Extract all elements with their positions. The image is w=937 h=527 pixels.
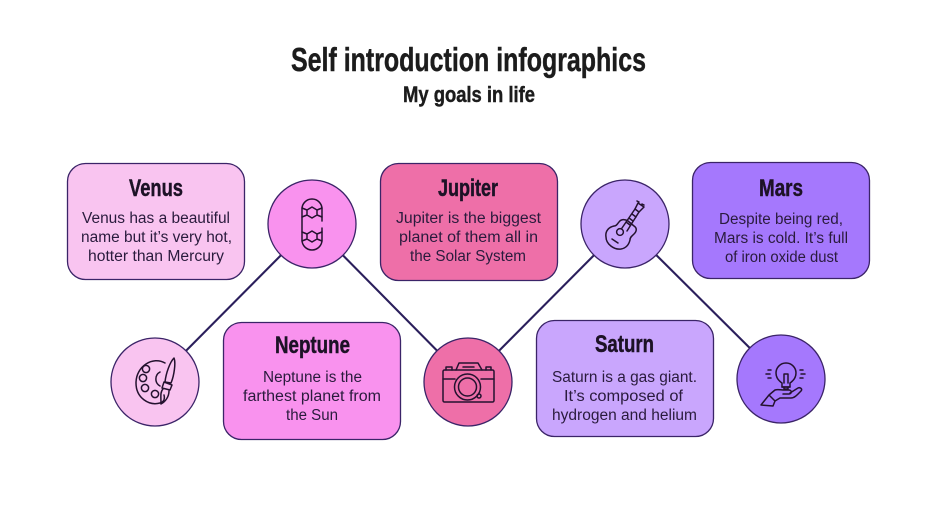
text: Jupiter description: the Solar System xyxy=(410,248,526,265)
text: Saturn description: It’s composed of xyxy=(564,388,684,405)
text: Mars description: Mars is cold. It’s full xyxy=(714,230,848,247)
circle: palette xyxy=(111,338,199,426)
text: Neptune description: farthest planet from xyxy=(243,388,381,405)
title: Self introduction infographics xyxy=(291,41,646,78)
panel: Mars xyxy=(692,162,870,278)
text: Venus description: name but it’s very hot, xyxy=(81,229,232,246)
text: Neptune description: Neptune is the xyxy=(263,369,362,386)
panel: Venus xyxy=(68,164,244,280)
panel: Neptune xyxy=(224,322,400,440)
circle: guitar xyxy=(581,180,669,268)
icon: palette and brush xyxy=(136,358,175,404)
circle: camera xyxy=(424,338,512,426)
text: Saturn description: hydrogen and helium xyxy=(552,407,697,424)
subtitle: My goals in life xyxy=(403,82,535,107)
circle: idea xyxy=(737,335,825,423)
text: Jupiter description: Jupiter is the biggest xyxy=(396,210,542,227)
icon: skateboard xyxy=(302,199,322,250)
heading: Neptune: Neptune xyxy=(275,332,350,359)
heading: Venus: Venus xyxy=(129,175,183,202)
text: Saturn description xyxy=(552,369,697,424)
text: Mars description: Despite being red, xyxy=(719,211,843,228)
text: Jupiter description xyxy=(396,210,542,265)
text: Jupiter description: planet of them all in xyxy=(399,229,538,246)
heading: Mars: Mars xyxy=(759,175,803,202)
heading: Jupiter: Jupiter xyxy=(438,175,498,202)
text: Saturn description: Saturn is a gas giant. xyxy=(552,369,697,386)
icon: light bulb in hand xyxy=(761,363,805,406)
icon: guitar xyxy=(606,201,644,249)
icon: camera xyxy=(443,363,494,402)
heading: Saturn: Saturn xyxy=(595,331,654,358)
circle: skateboard xyxy=(268,180,356,268)
text: Neptune description xyxy=(243,369,381,424)
text: Mars description xyxy=(714,211,848,266)
text: Mars description: of iron oxide dust xyxy=(725,249,839,266)
text: Venus description: hotter than Mercury xyxy=(88,248,224,265)
text: Neptune description: the Sun xyxy=(286,407,338,424)
connector line xyxy=(155,224,781,382)
panel: Saturn xyxy=(536,320,714,436)
panel: Jupiter xyxy=(380,164,558,280)
text: Venus description: Venus has a beautiful xyxy=(82,210,230,227)
text: Venus description xyxy=(81,210,232,265)
